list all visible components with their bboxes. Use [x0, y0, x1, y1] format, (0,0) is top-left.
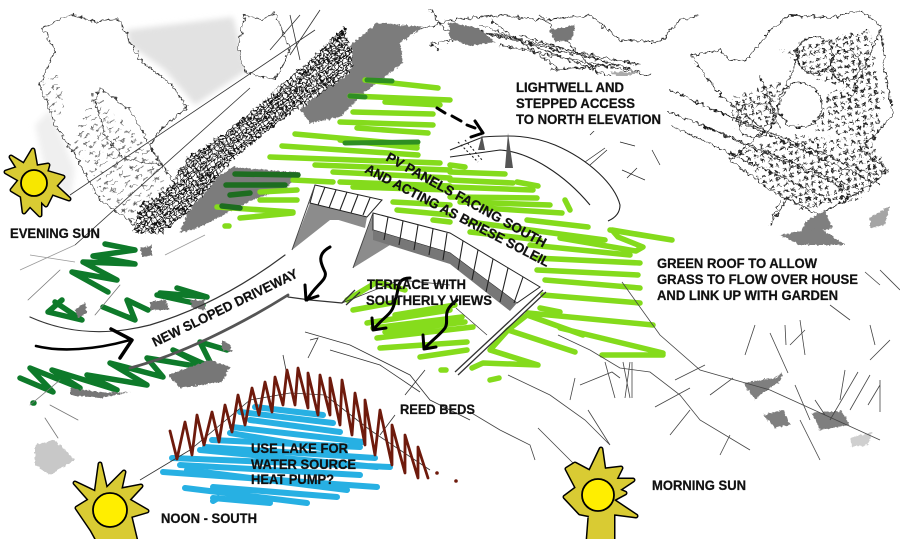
dark grey tree shadows [180, 23, 423, 233]
right tree [665, 10, 893, 225]
dense conifer hatching [133, 25, 353, 233]
label: PV panels: AND ACTING AS BRIESE SOLEIL [363, 161, 552, 270]
label: lake: HEAT PUMP? [251, 472, 334, 487]
lime scribble: terrace [347, 282, 473, 370]
label: driveway: NEW SLOPED DRIVEWAY [150, 266, 300, 350]
label: terrace [366, 277, 492, 308]
label: lightwell: STEPPED ACCESS [516, 96, 635, 111]
arrow: driveway entry [36, 329, 132, 358]
label: lightwell: TO NORTH ELEVATION [516, 112, 661, 127]
arrow: dashed to north elevation [437, 108, 483, 137]
label: terrace: TERRACE WITH [367, 277, 466, 292]
arrow: wavy terrace left [372, 278, 410, 330]
lime scribbles: PV panel roof [217, 80, 672, 380]
left tree outlines [40, 12, 290, 225]
label: green roof: GREEN ROOF TO ALLOW [657, 256, 817, 271]
label: evening sun: EVENING SUN [10, 226, 100, 241]
grey shading at top strip [448, 22, 640, 78]
label: morning sun: MORNING SUN [652, 478, 746, 493]
arrow: wavy to driveway [305, 247, 330, 300]
dark green overlay lower left of roof [222, 174, 298, 208]
brown reed bed scribble [170, 368, 458, 483]
right tree dense hatching [730, 30, 888, 210]
label: green roof: GRASS TO FLOW OVER HOUSE [657, 272, 858, 287]
label: noon sun: NOON - SOUTH [161, 511, 257, 526]
house terrace roof and supports [292, 185, 540, 311]
label: terrace: SOUTHERLY VIEWS [366, 293, 492, 308]
label: lightwell: LIGHTWELL AND [516, 80, 624, 95]
driveway edge lines [28, 255, 342, 438]
left tree inner hatching [42, 75, 170, 225]
terrace edge wall [342, 280, 546, 375]
sun: morning [565, 449, 636, 539]
dark green overlay on lime roof [345, 80, 418, 143]
label: lake: USE LAKE FOR [251, 441, 348, 456]
arrow: wavy terrace right [423, 300, 457, 349]
lightwell curved walls [450, 130, 660, 221]
label: reed beds: REED BEDS [400, 402, 475, 417]
garden site lines [470, 270, 900, 470]
label: green roof [657, 256, 858, 303]
label: PV panels: PV PANELS FACING SOUTH [384, 150, 549, 250]
sun: noon [75, 464, 147, 539]
label: lake: WATER SOURCE [251, 457, 356, 472]
diagonal construction lines [20, 10, 320, 270]
dark green planting scribbles [20, 244, 227, 403]
lake outline lines [140, 332, 470, 480]
small grey patches right [743, 205, 890, 447]
grey shadows under planting [35, 245, 232, 475]
label: green roof: AND LINK UP WITH GARDEN [657, 288, 838, 303]
lightwell dark buttresses [478, 133, 513, 168]
label: lake [251, 441, 356, 487]
top tree strip [420, 10, 700, 78]
grey sky wash behind left trees [35, 17, 247, 200]
label: lightwell [505, 76, 667, 131]
sun: evening [6, 150, 69, 215]
blue lake scribble [163, 407, 390, 503]
